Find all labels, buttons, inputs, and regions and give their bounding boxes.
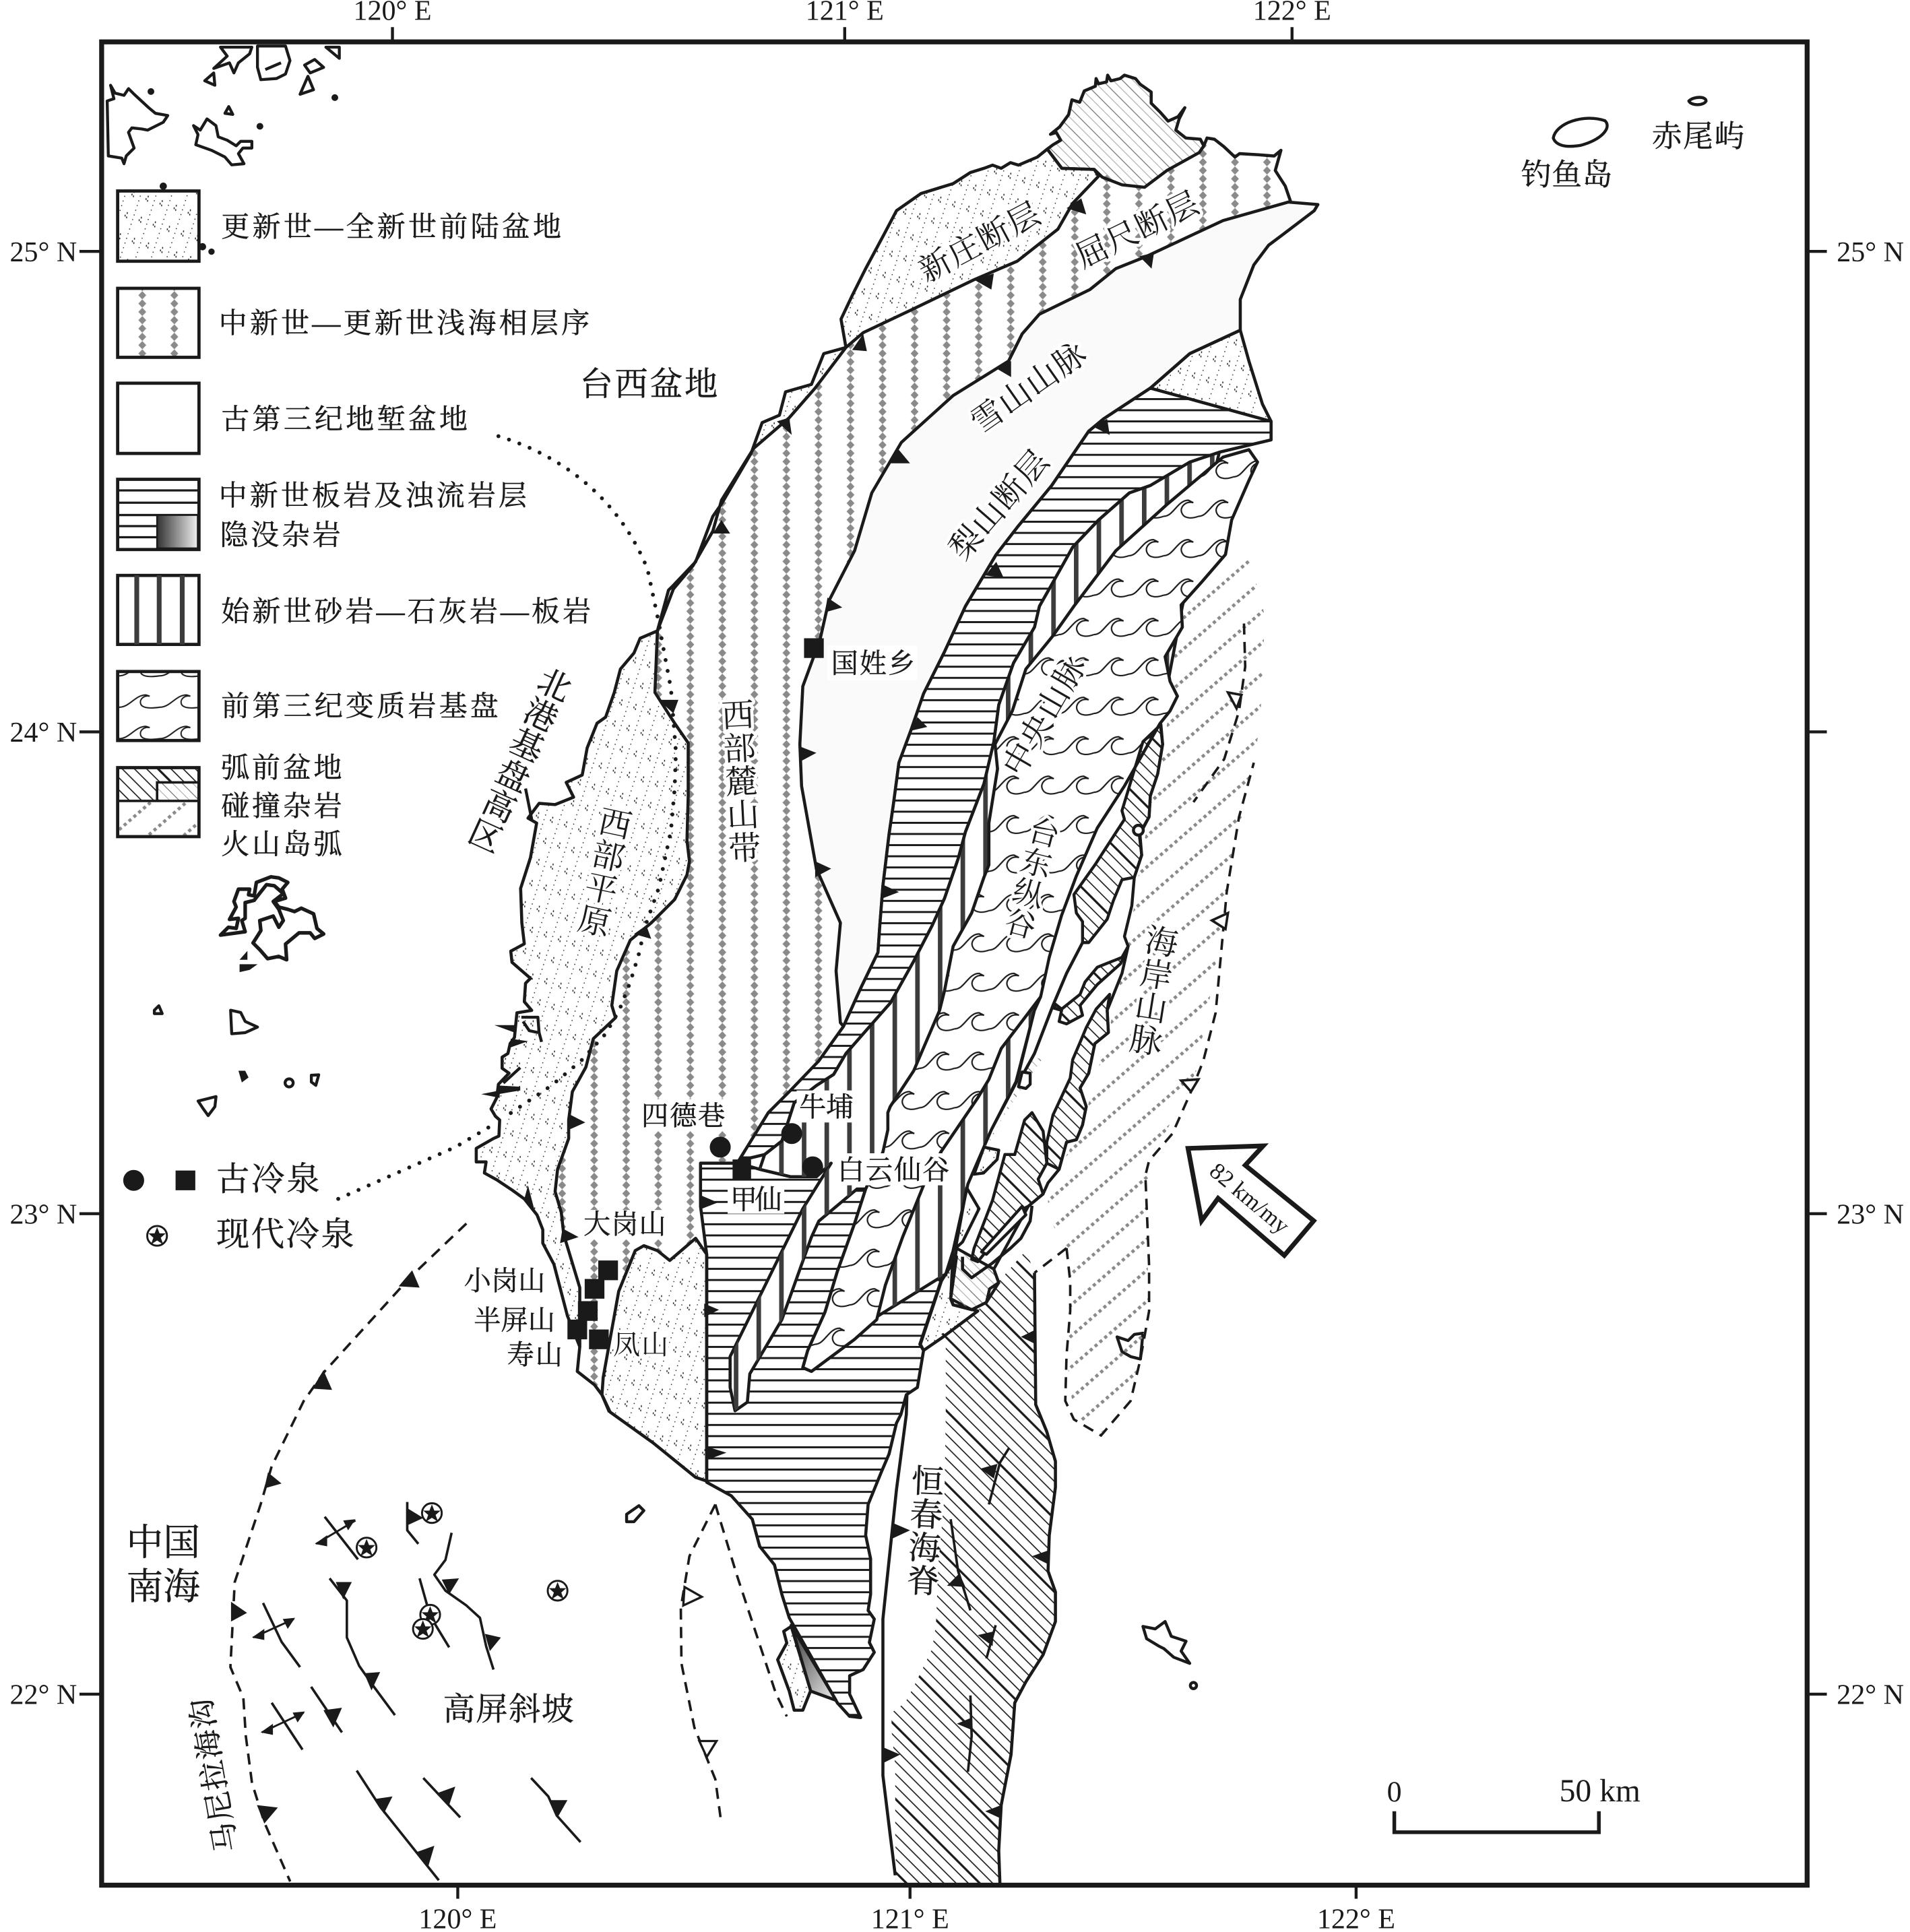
label: Banpingshan: 半屏山 (474, 1306, 555, 1336)
square: Jiaxian (732, 1159, 751, 1179)
hatched strip A (1074, 725, 1163, 942)
symbol legend: ancient seep (123, 1161, 320, 1198)
label: Baiyun valley: 白云仙谷 (837, 1155, 949, 1185)
label: Gaoping slope: 高屏斜坡 (443, 1692, 573, 1727)
slit in strip D (982, 1206, 1026, 1254)
label: Quchi fault: 屈尺断层 (1071, 185, 1205, 276)
legend label: volcanic arc: 火山岛弧 (221, 829, 342, 861)
symbol legend: modern seep: 现代冷泉 (216, 1216, 354, 1253)
label: Coastal range: 海岸山脉 (1122, 922, 1180, 1059)
coastal spurs (481, 789, 542, 1098)
islands: northwest Fujian coast (107, 46, 340, 255)
Eocene belt (730, 452, 1219, 1411)
label: Western foothills: 西部麓山带 (715, 697, 761, 865)
small stippled piece (955, 1188, 979, 1248)
trench teeth (231, 1270, 420, 1824)
modern seeps (356, 1503, 567, 1639)
axis labels and ticks: 23° N (10, 1199, 77, 1230)
offshore dashed deformation front (681, 1504, 721, 1820)
scale bar (1387, 1774, 1641, 1832)
axis labels and ticks: 25° N (1837, 237, 1904, 268)
label: Central range: 中央山脉 (997, 649, 1094, 782)
arc outer dashed fault (1193, 624, 1245, 802)
northeast foreland triangle (1150, 330, 1271, 422)
small block (1019, 1072, 1030, 1089)
legend swatch: Pleistocene-Holocene foreland basin (118, 191, 199, 261)
southern tip melange wedge (777, 1625, 836, 1710)
small circle (1133, 825, 1143, 835)
labels on the map (126, 120, 1744, 1855)
stippled blob (974, 1147, 998, 1174)
squares: southwest mud sites (567, 1260, 618, 1349)
legend swatch: Miocene-Pleistocene shallow marine (118, 288, 199, 357)
symbol legend: ancient seep: 古冷泉 (216, 1161, 320, 1198)
northern slate belt lines (738, 388, 1271, 1161)
plate motion arrow: 82 km/my (1205, 1157, 1295, 1239)
legend label: forearc basin: 弧前盆地 (221, 753, 342, 784)
volcanic arc unit (1034, 542, 1265, 1436)
dotted boundaries (338, 436, 676, 1199)
label: Xiaogangshan: 小岗山 (464, 1266, 545, 1296)
symbol legend: modern seep (148, 1216, 354, 1253)
southeast stippled foreland piece (920, 1257, 978, 1351)
hatched strip B (1053, 946, 1128, 1024)
label: Beigang basement high: 北港基盘高区 (459, 660, 576, 858)
label: Jiaxian: 甲仙 (730, 1184, 782, 1215)
melange thin hatch (974, 1056, 1042, 1174)
lower loop line (963, 1206, 1032, 1278)
label: Chiwei: 赤尾屿 (1652, 120, 1744, 154)
northern foreland basin unit (841, 149, 1099, 348)
circles: ancient seeps (710, 1123, 823, 1178)
label: Shoushan: 寿山 (507, 1340, 563, 1370)
rift inner thrust (1021, 942, 1083, 1078)
label: Manila trench: 马尼拉海沟 (185, 1694, 244, 1855)
northwest coastal sliver (658, 348, 846, 631)
slope fault teeth (323, 1508, 567, 1867)
legend label: slate and turbidite: 中新世板岩及浊流岩层 (219, 480, 527, 512)
label: Taitung valley: 台东纵谷 (998, 812, 1062, 942)
Hsuehshan Range belt (800, 202, 1318, 1027)
axis labels and ticks: 22° N (10, 1680, 77, 1711)
legend swatch: forearc, collision melange, volcanic arc (118, 768, 199, 837)
cold seep markers (356, 638, 824, 1639)
legend swatch: pre-Tertiary basement (118, 672, 199, 740)
southwest coast (577, 1347, 609, 1412)
Western Foothills unit (555, 143, 1291, 1395)
label: South China Sea line 2: 南海 (126, 1566, 200, 1607)
legend swatch: Miocene slate and melange (118, 480, 199, 550)
legend (118, 191, 591, 861)
axis labels and ticks: 25° N (10, 237, 77, 268)
islands: Penghu (154, 877, 323, 1116)
axis labels and ticks: 23° N (1837, 1199, 1904, 1230)
label: Guoxing: 国姓乡 (831, 649, 915, 679)
wedge east boundary (998, 1273, 1056, 1885)
Fengshan foreland unit (602, 1238, 707, 1481)
legend label: foreland basin: 更新世—全新世前陆盆地 (221, 212, 561, 243)
label: Xueshan range: 雪山山脉 (965, 335, 1094, 441)
legend swatch: Paleogene graben (118, 383, 199, 453)
accretionary wedge: Hengchun ridge (883, 1251, 1056, 1885)
axis labels and ticks: 24° N (10, 717, 77, 748)
western coastal plain stipple (476, 631, 689, 1347)
label: South China Sea line 1: 中国 (126, 1522, 200, 1563)
pre-Tertiary metamorphic basement (803, 450, 1258, 1372)
hatched strip D (972, 1113, 1047, 1262)
southern slate unit (701, 1163, 941, 1718)
thrust teeth (524, 198, 1154, 1460)
northern volcanic hatch unit (1047, 75, 1204, 187)
label: Dagangshan: 大岗山 (583, 1209, 666, 1239)
western coastal plain unit (476, 631, 689, 1347)
label: Niupu: 牛埔 (799, 1092, 854, 1122)
hatched strip C (1047, 994, 1110, 1169)
legend label: collision melange: 碰撞杂岩 (221, 791, 342, 823)
Hengchun thrust (883, 1395, 907, 1875)
label: Xinzhuang fault: 新庄断层 (914, 196, 1047, 290)
plate motion arrow (1188, 1146, 1314, 1256)
legend label: Eocene sandstone: 始新世砂岩—石灰岩—板岩 (221, 597, 591, 628)
label: Lishan fault: 梨山断层 (943, 443, 1057, 567)
islands: Diaoyu, Chiwei, Lanyu, Xiaoliuqiu (627, 97, 1706, 1689)
legend label: Paleogene graben: 古第三纪地堑盆地 (221, 405, 468, 436)
fold arrows (252, 1519, 356, 1735)
inner faults (951, 1448, 1009, 1772)
scale bar: 50 km (1560, 1774, 1641, 1809)
arc dashed outline (1034, 763, 1254, 1436)
label: Fengshan: 凤山 (613, 1330, 668, 1360)
legend label: subduction melange: 隐没杂岩 (220, 519, 341, 551)
scale bar: 0 (1387, 1776, 1402, 1808)
northern slate belt (738, 388, 1271, 1161)
basement wave fill (803, 450, 1258, 1372)
open triangles on offshore arc fault (1181, 693, 1242, 1092)
slope faults (263, 1502, 581, 1880)
legend swatch: Eocene sandstone (118, 575, 199, 645)
label: Hengchun ridge: 恒春海脊 (901, 1463, 944, 1598)
Eocene belt stripes (730, 452, 1219, 1411)
axis labels and ticks: 22° N (1837, 1680, 1904, 1711)
label: Sidexiang: 四德巷 (641, 1101, 725, 1131)
Coastal Range and rift zone (951, 723, 1163, 1310)
lower melange (951, 1248, 998, 1310)
South China Sea trench and faults (230, 1223, 787, 1881)
label: Western plain: 西部平原 (570, 802, 634, 940)
north coast line (1204, 138, 1291, 202)
label: Taixi basin: 台西盆地 (580, 366, 718, 403)
legend label: shallow marine: 中新世—更新世浅海相层序 (219, 309, 590, 340)
legend label: pre-Tertiary basement: 前第三纪变质岩基盘 (221, 691, 499, 723)
Manila trench (230, 1223, 466, 1881)
square: Guoxing (804, 638, 824, 658)
label: Diaoyu: 钓鱼岛 (1521, 158, 1612, 191)
